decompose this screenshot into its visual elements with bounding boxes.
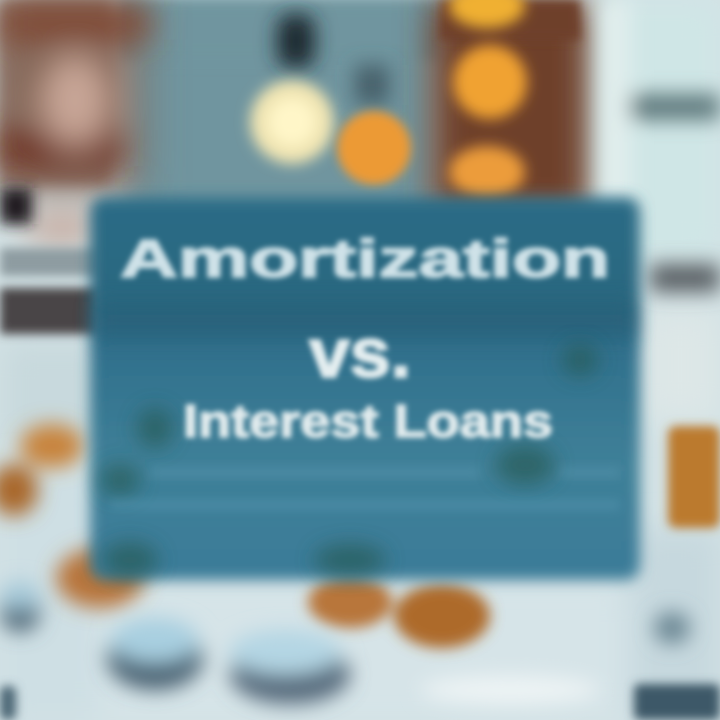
right window shadows [600, 0, 720, 292]
shelf: left brown [0, 0, 135, 190]
brown column with lights [430, 0, 590, 215]
coins bottom centre [308, 576, 490, 648]
panel shading band [95, 302, 635, 338]
dark block bottom right [634, 684, 720, 720]
heading: Amortization: Amortization [120, 229, 610, 289]
shelf: left dark corner [0, 188, 32, 224]
icon: orange bulb [337, 65, 411, 185]
shelf: left highlights [0, 6, 150, 246]
blue discs on the table [0, 582, 690, 704]
small leaf shapes [100, 344, 598, 578]
orange jar right [668, 426, 720, 528]
faint sub text lines [110, 468, 620, 510]
dark disc bottom left [0, 686, 16, 720]
panel: teal sign [90, 197, 640, 580]
icon: hanging bulb [250, 14, 334, 164]
heading: vs.: vs. [309, 314, 411, 392]
icon: column lights [449, 0, 527, 198]
table surface [0, 470, 720, 720]
coins left [0, 424, 144, 608]
heading: Interest Loans: Interest Loans [183, 395, 553, 447]
shelf: left dark band [0, 248, 100, 334]
